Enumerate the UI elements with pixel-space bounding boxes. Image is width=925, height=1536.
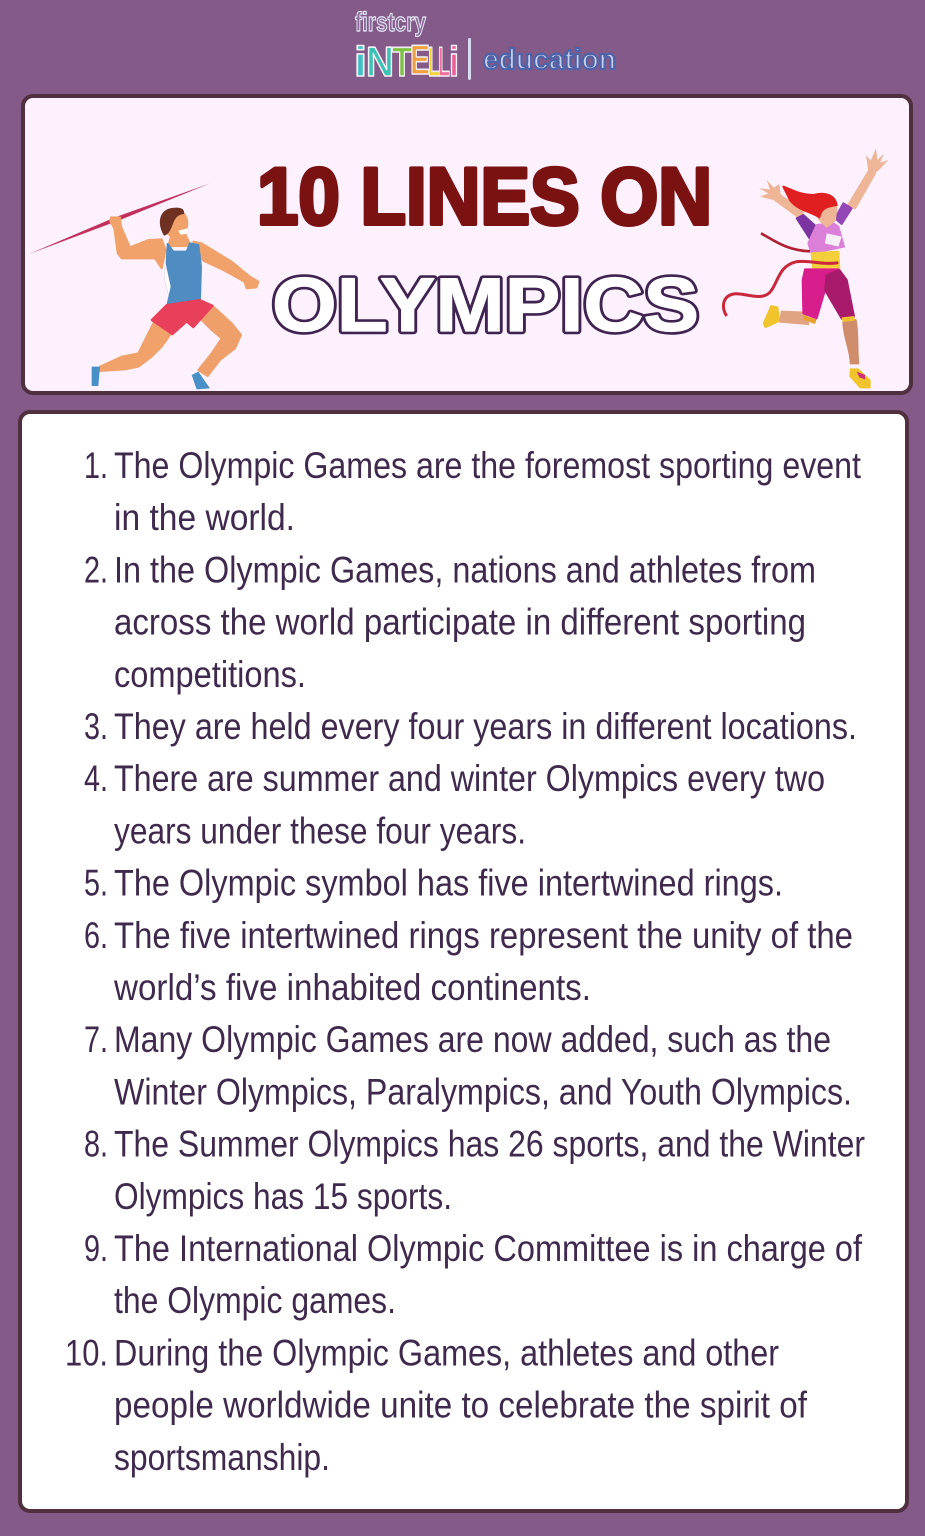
logo: intelli: N	[366, 38, 394, 85]
item 10: people worldwide unite to celebrate the spirit of	[114, 1385, 808, 1426]
item 7: 7.	[84, 1019, 108, 1060]
item 4: There are summer and winter Olympics every two	[114, 758, 825, 799]
logo: education: education	[483, 44, 616, 76]
item 2	[84, 549, 816, 695]
item 9: the Olympic games.	[114, 1280, 396, 1321]
illustration: runner at finish line	[723, 148, 888, 388]
logo: intelli	[354, 36, 459, 85]
item 10	[65, 1332, 808, 1478]
item 9	[84, 1228, 863, 1321]
item 2: across the world participate in different sporting	[114, 602, 806, 643]
logo: intelli: L	[428, 38, 440, 85]
item 1: 1.	[84, 445, 108, 486]
item 1: in the world.	[114, 497, 295, 538]
item 8: 8.	[84, 1124, 108, 1165]
item 7	[84, 1019, 852, 1112]
item 1	[84, 445, 862, 538]
logo: firstcry: firstcry	[355, 7, 426, 37]
logo	[354, 7, 616, 85]
item 6: 6.	[84, 915, 108, 956]
item 4	[84, 758, 825, 851]
content panel	[18, 410, 909, 1513]
item 9: 9.	[84, 1228, 108, 1269]
item 5: The Olympic symbol has five intertwined rings.	[114, 863, 783, 904]
logo: divider	[468, 38, 471, 80]
item 2: 2.	[84, 549, 108, 590]
logo: intelli: i	[449, 38, 459, 85]
item 3: 3.	[84, 706, 108, 747]
item 7: Many Olympic Games are now added, such as the	[114, 1019, 831, 1060]
item 10: During the Olympic Games, athletes and other	[114, 1332, 779, 1373]
item 8	[84, 1124, 865, 1217]
logo: intelli: i	[354, 38, 367, 85]
item 5: 5.	[84, 863, 108, 904]
item 2: competitions.	[114, 654, 306, 695]
numbered list	[65, 445, 865, 1478]
item 6: The five intertwined rings represent the unity of the	[114, 915, 853, 956]
item 6	[84, 915, 853, 1008]
item 8: Olympics has 15 sports.	[114, 1176, 452, 1217]
logo: intelli: E	[410, 36, 430, 83]
title line 1: 10 LINES ON	[257, 152, 712, 242]
logo: intelli: T	[392, 38, 412, 85]
item 10: 10.	[65, 1332, 108, 1373]
title line 2: OLYMPICS	[272, 263, 699, 348]
item 4: 4.	[84, 758, 108, 799]
logo: intelli: L	[438, 38, 450, 85]
item 4: years under these four years.	[114, 810, 526, 851]
item 6: world’s five inhabited continents.	[113, 967, 591, 1008]
item 2: In the Olympic Games, nations and athletes from	[114, 549, 816, 590]
illustration: javelin thrower	[29, 183, 258, 389]
title line 2: OLYMPICS	[272, 263, 699, 348]
header panel	[21, 94, 913, 395]
item 10: sportsmanship.	[114, 1437, 330, 1478]
